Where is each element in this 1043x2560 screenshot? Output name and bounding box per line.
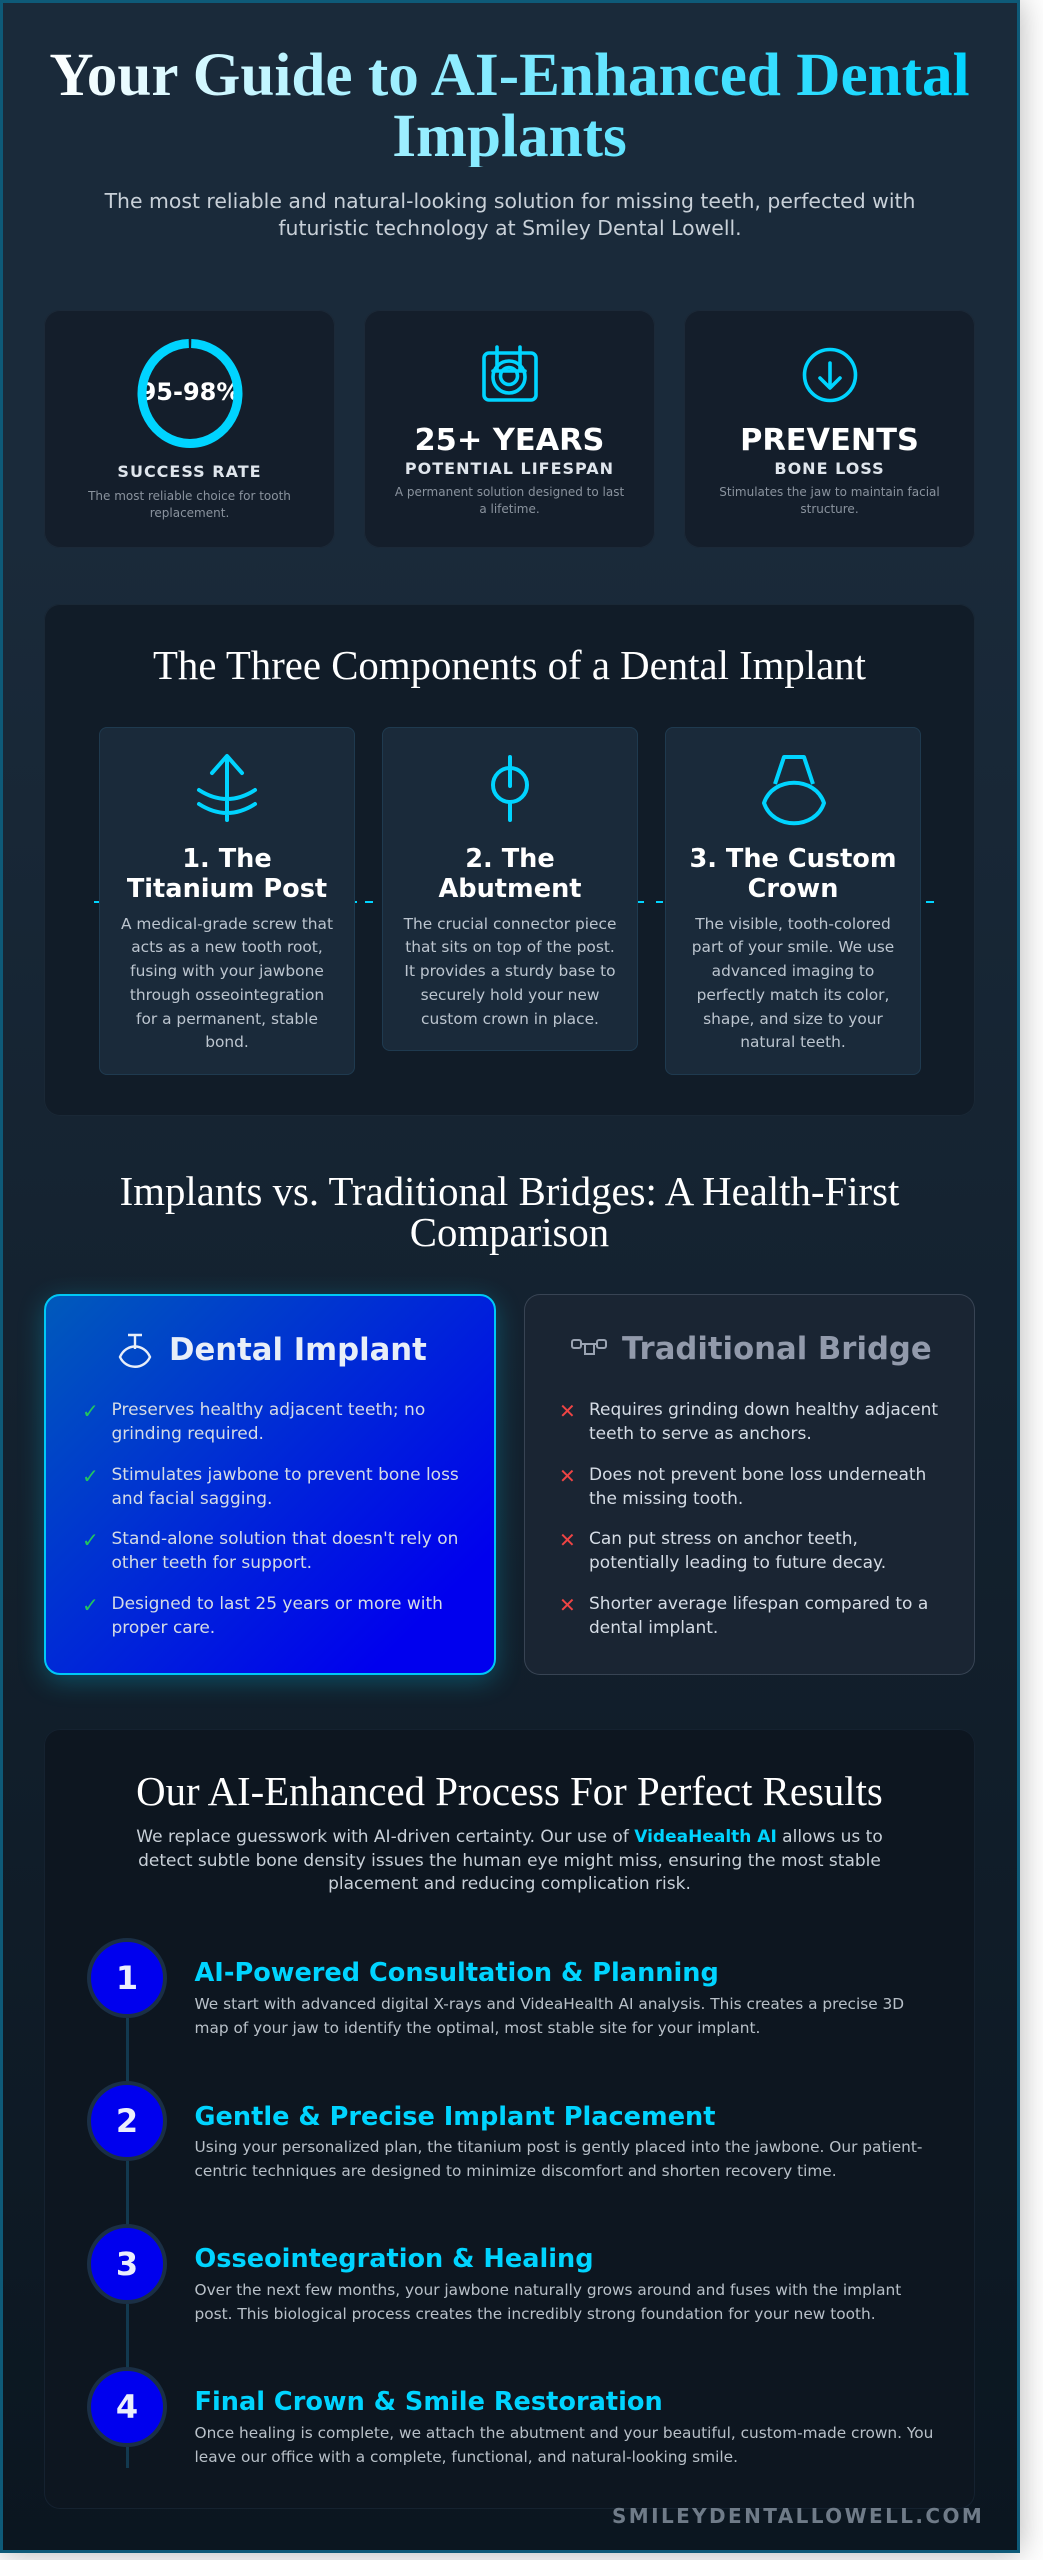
card text: bond. [205,1033,249,1051]
card heading [127,844,327,904]
benefits list: Preserves healthy adjacent teeth; no [112,1400,425,1420]
card heading: 1. The [182,844,272,874]
step text [194,2138,922,2180]
drawbacks list: ✕ [559,1464,576,1488]
step text [194,2424,933,2466]
step number: 2 [116,2102,138,2140]
icon: arrow circle [802,348,858,402]
section heading: comparison [120,1169,900,1255]
stat label: SUCCESS RATE [117,462,262,481]
intro text [136,1827,883,1894]
icon: abutment [491,755,529,822]
benefits list: ✓ [82,1528,99,1552]
title: Implants [392,102,627,170]
card: abutment [382,727,638,1051]
icon: implant [118,1334,152,1368]
step text: centric techniques are designed to minimize discomfort and shorten recovery time. [194,2162,837,2180]
benefits list: Designed to last 25 years or more with [112,1594,443,1614]
stat value: 25+ YEARS [415,422,604,458]
step text: Once healing is complete, we attach the abutment and your beautiful, custom-made crown. You [194,2424,933,2442]
drawbacks list: ✕ [559,1593,576,1617]
card heading [438,844,582,904]
icon: progress ring [138,339,242,448]
step title: Final Crown & Smile Restoration [194,2387,663,2417]
subtitle: The most reliable and natural-looking solution for missing teeth, perfected with [105,188,915,212]
step 3 [87,2224,901,2323]
card text: perfectly match its color, [697,986,889,1004]
step number: 3 [116,2245,138,2283]
card text: advanced imaging to [712,962,874,980]
step text [194,2281,901,2323]
icon: bridge [571,1339,607,1355]
card heading: 3. The Custom [689,844,897,874]
panel: lifespan stat [364,310,655,548]
stat description: The most reliable choice for tooth [88,489,291,503]
card text: The visible, tooth-colored [695,914,891,932]
card text: through osseointegration [130,986,324,1004]
drawbacks list: ✕ [559,1528,576,1552]
panel: bone loss stat [684,310,975,548]
step text: Over the next few months, your jawbone naturally grows around and fuses with the implant [194,2281,901,2299]
stat description: a lifetime. [479,502,540,516]
icon: crown [762,755,826,826]
step number: 4 [116,2388,138,2426]
drawbacks list: potentially leading to future decay. [589,1552,886,1572]
panel: traditional bridge [524,1294,975,1675]
drawbacks list [559,1399,938,1638]
drawbacks list: Shorter average lifespan compared to a [589,1594,928,1614]
title [44,45,975,167]
title: Your Guide to AI-Enhanced Dental [49,41,970,109]
panel heading: Traditional Bridge [622,1332,932,1366]
panel: success rate stat [44,310,335,548]
card text: A medical-grade screw that [121,914,333,932]
benefits list: Stimulates jawbone to prevent bone loss [112,1464,459,1484]
drawbacks list: Does not prevent bone loss underneath [589,1464,926,1484]
step title: Gentle & Precise Implant Placement [194,2102,716,2132]
step text: map of your jaw to identify the optimal, most stable site for your implant. [194,2019,760,2037]
benefits list: ✓ [82,1399,99,1423]
step text: We start with advanced digital X-rays and VideaHealth AI analysis. This creates a precise 3D [194,1995,904,2013]
step text: post. This biological process creates the incredibly strong foundation for your new tooth. [194,2305,876,2323]
stat label: BONE LOSS [774,459,885,478]
card heading: Abutment [438,874,582,904]
benefits list: proper care. [112,1618,215,1638]
card text: acts as a new tooth root, [131,938,323,956]
icon: calendar [482,345,538,402]
panel heading: Dental Implant [169,1332,427,1368]
step 2 [87,2081,922,2180]
drawbacks list: dental implant. [589,1618,718,1638]
drawbacks list: Can put stress on anchor teeth, [589,1528,858,1548]
card text: fusing with your jawbone [130,962,324,980]
stat description: structure. [800,502,859,516]
section heading: Our AI-Enhanced Process For Perfect Results [136,1769,883,1814]
section heading: comparison: Implants vs. Traditional Bridges: A Health-First [120,1169,899,1214]
drawbacks list: teeth to serve as anchors. [589,1424,812,1444]
card: custom crown [665,727,921,1075]
stat description: Stimulates the jaw to maintain facial [719,485,940,499]
subtitle [104,188,915,240]
stat description: replacement. [150,506,229,520]
icon: titanium post [196,754,258,822]
card heading: Titanium Post [127,874,327,904]
benefits list: grinding required. [112,1424,264,1444]
benefits list: other teeth for support. [112,1552,312,1572]
step number [87,1938,167,2018]
step text: Using your personalized plan, the titanium post is gently placed into the jawbone. Our patient- [194,2138,922,2156]
card text: shape, and size to your [703,1010,883,1028]
panel: dental implant [44,1294,496,1675]
card text: part of your smile. We use [692,938,894,956]
stat description [719,485,940,516]
benefits list: ✓ [82,1593,99,1617]
step title: Osseointegration & Healing [194,2244,594,2274]
stat description [395,485,624,516]
benefits list: and facial sagging. [112,1488,272,1508]
section heading: comparison: Comparison [410,1210,609,1255]
benefits list: ✓ [82,1464,99,1488]
section heading: The Three Components of a Dental Implant [153,643,866,688]
step number: 1 [116,1959,138,1997]
stat label: POTENTIAL LIFESPAN [405,459,614,478]
card heading: Crown [748,874,838,904]
step number [87,2367,167,2447]
stat description [88,489,291,520]
intro text: placement and reducing complication risk. [328,1874,691,1894]
card text: securely hold your new [421,986,599,1004]
benefits list: Stand-alone solution that doesn't rely on [112,1528,458,1548]
step 1 [87,1938,904,2037]
step 4 [87,2367,933,2466]
stat description: A permanent solution designed to last [395,485,624,499]
step text: leave our office with a complete, functional, and natural-looking smile. [194,2448,738,2466]
stat value: PREVENTS [740,422,919,458]
card text: The crucial connector piece [404,914,616,932]
subtitle: futuristic technology at Smiley Dental Lowell. [278,216,742,240]
step number [87,2081,167,2161]
footer website: SMILEYDENTALLOWELL.COM [612,2504,984,2528]
card text [121,914,333,1051]
intro text: detect subtle bone density issues the human eye might miss, ensuring the most stable [138,1851,881,1871]
card text [404,914,616,1028]
step title: AI-Powered Consultation & Planning [194,1958,719,1988]
card heading: 2. The [465,844,555,874]
intro text: We replace guesswork with AI-driven certainty. Our use of VideaHealth AI allows us to [136,1827,883,1847]
ring value: 95-98% [140,378,240,406]
card text [692,914,894,1051]
panel: three components [44,604,975,1116]
step number [87,2224,167,2304]
card text: natural teeth. [740,1033,846,1051]
card: titanium post [99,727,355,1075]
card heading [689,844,897,904]
drawbacks list: the missing tooth. [589,1488,743,1508]
card text: for a permanent, stable [136,1010,318,1028]
panel: AI process [44,1729,975,2509]
benefits list [82,1399,459,1638]
step text [194,1995,904,2037]
drawbacks list: ✕ [559,1399,576,1423]
card text: that sits on top of the post. [405,938,615,956]
card text: It provides a sturdy base to [404,962,616,980]
drawbacks list: Requires grinding down healthy adjacent [589,1400,938,1420]
card text: custom crown in place. [421,1010,599,1028]
